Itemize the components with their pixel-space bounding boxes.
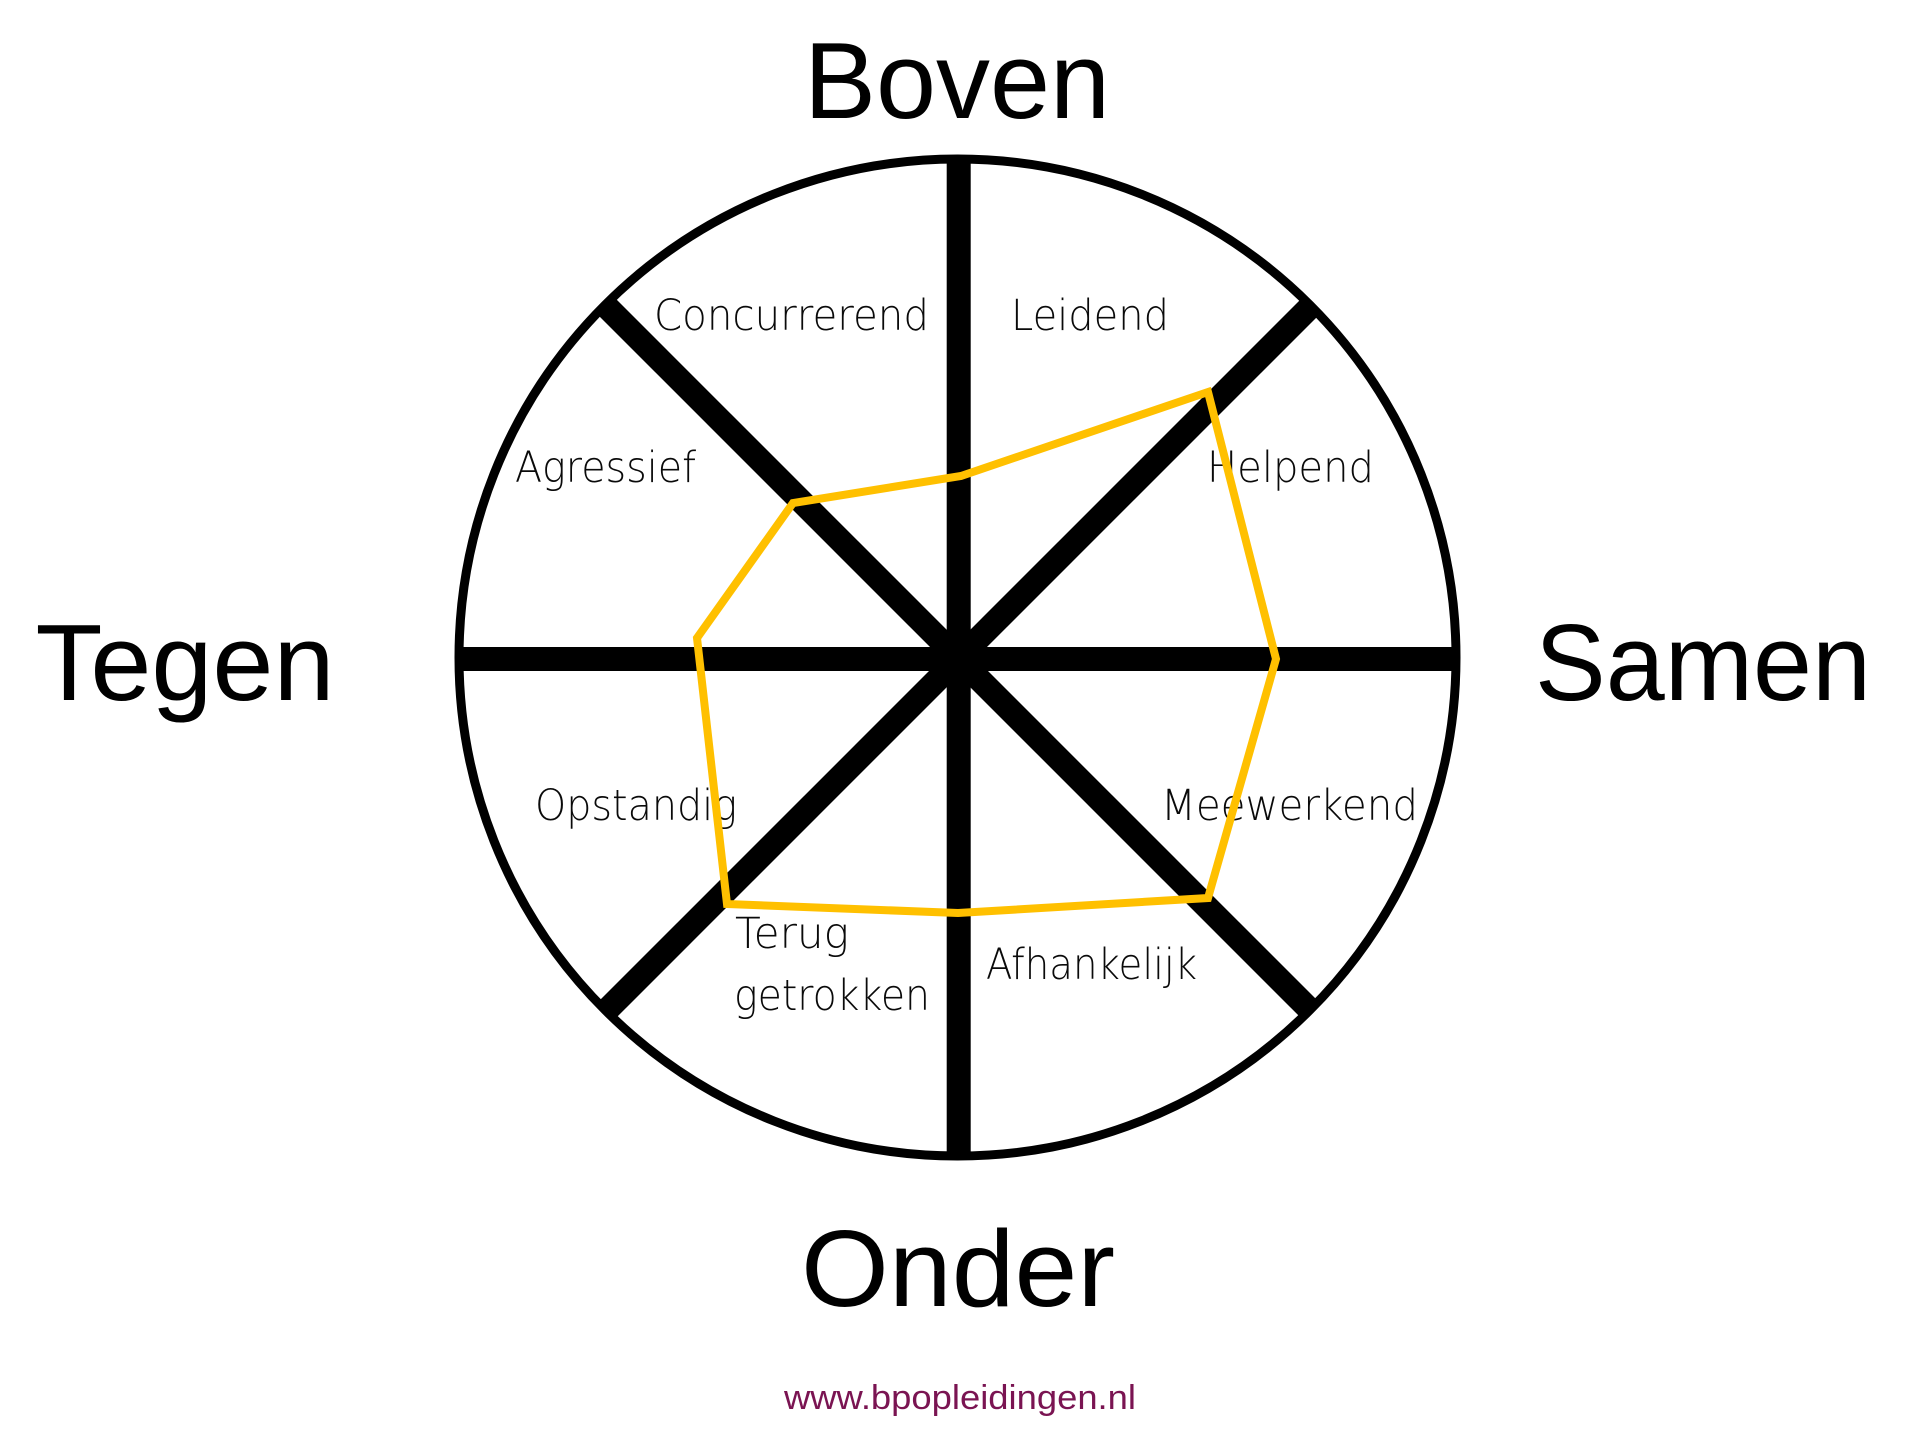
label: Opstandig: Opstandig (535, 781, 737, 831)
label: Agressief: Agressief (515, 443, 696, 493)
chart: circle with spokes (458, 157, 1458, 1158)
label: Afhankelijk: Afhankelijk (986, 940, 1197, 990)
label: Leidend: Leidend (1011, 291, 1169, 341)
website url: www.bpopleidingen.nl (783, 1379, 1136, 1417)
label: Terug getrokken: Terug (735, 909, 849, 959)
label: Meewerkend: Meewerkend (1161, 781, 1418, 831)
heading: Tegen: Tegen (36, 602, 334, 724)
heading: Samen: Samen (1535, 602, 1871, 724)
spokes (458, 157, 1458, 1158)
label: Terug getrokken: getrokken (734, 971, 930, 1021)
label: Concurrerend: Concurrerend (654, 291, 929, 341)
label: Terug getrokken (734, 909, 930, 1021)
heading: Boven: Boven (804, 20, 1110, 142)
outer circle (459, 159, 1456, 1156)
heading: Onder: Onder (801, 1208, 1115, 1330)
label: Helpend: Helpend (1207, 443, 1374, 493)
profile polygon (697, 392, 1276, 913)
